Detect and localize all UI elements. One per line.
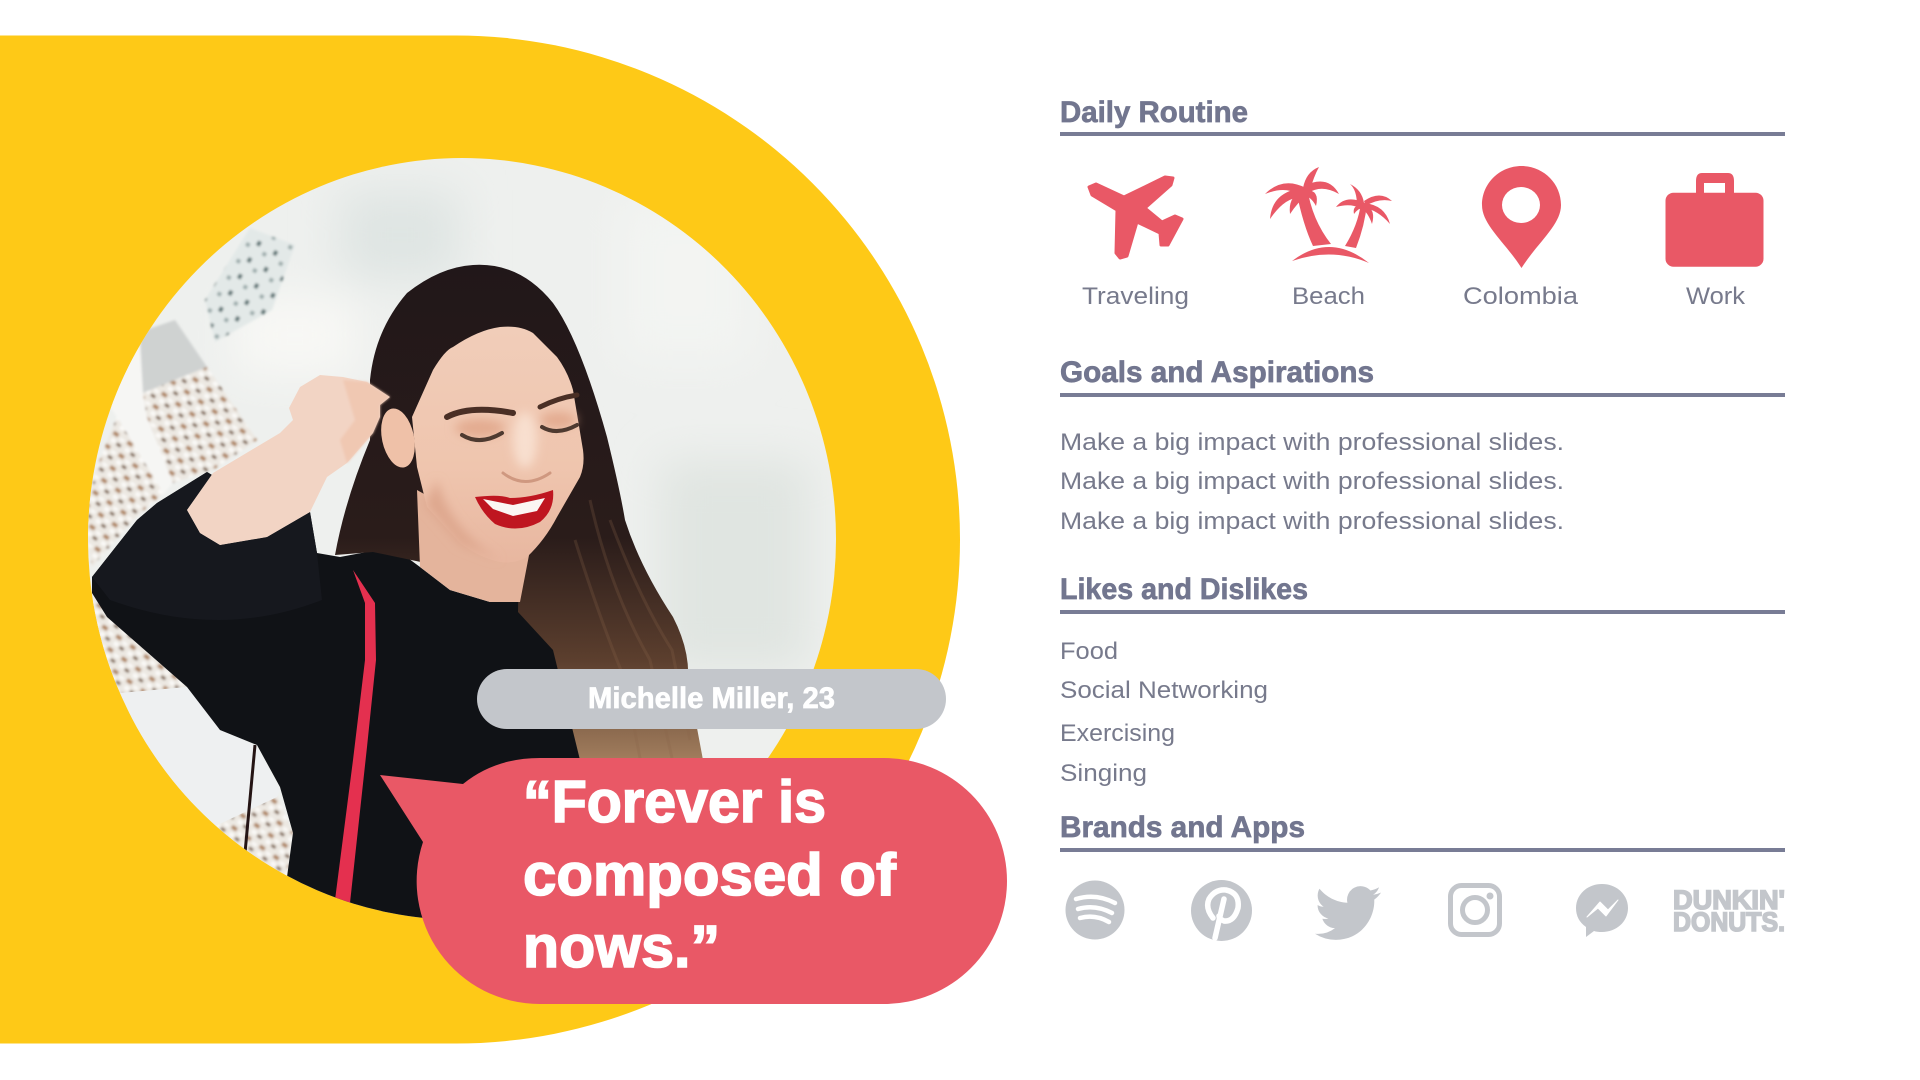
smile: [475, 490, 553, 529]
label: beach: Beach: [1292, 283, 1365, 310]
section: brands and apps: [1060, 811, 1785, 941]
quote bubble: “Forever is: [523, 769, 826, 835]
likes list: [1060, 638, 1268, 787]
name tag: Michelle Miller, 23: [588, 682, 835, 715]
likes list: Food: [1060, 638, 1118, 665]
icon: spotify: [1066, 880, 1124, 940]
wall mosaic: [84, 228, 295, 880]
label: work: Work: [1686, 283, 1746, 310]
ear: [381, 408, 415, 468]
black top: [92, 472, 580, 918]
label: colombia: Colombia: [1463, 283, 1579, 310]
logo: dunkin donuts: [1673, 885, 1785, 937]
label: traveling: Traveling: [1082, 283, 1189, 310]
heading: goals: Goals and Aspirations: [1060, 356, 1374, 389]
neck: [417, 490, 530, 602]
heading: brands: Brands and Apps: [1060, 811, 1305, 844]
brows and eyes: [447, 395, 577, 482]
sleeve highlight: [92, 472, 317, 577]
quote bubble: [380, 758, 1007, 1004]
yellow arch background: [0, 36, 960, 1044]
icon: plane: [1089, 177, 1182, 258]
face shading: [425, 412, 576, 560]
heading: daily routine: Daily Routine: [1060, 96, 1248, 129]
icon: twitter: [1315, 886, 1381, 940]
icon: pinterest: [1191, 880, 1252, 941]
hair strands: [574, 500, 677, 669]
portrait photo: [80, 150, 850, 930]
hair: [335, 265, 703, 760]
icon: palm trees: [1265, 167, 1392, 263]
likes list: Social Networking: [1060, 677, 1268, 704]
heading: likes: Likes and Dislikes: [1060, 573, 1308, 606]
goals text: [1060, 429, 1564, 535]
logo: dunkin donuts: DONUTS.: [1673, 907, 1785, 937]
section: likes and dislikes: [1060, 573, 1785, 787]
bag straps: [335, 570, 376, 903]
likes list: Exercising: [1060, 720, 1175, 747]
hand shading: [340, 380, 390, 463]
name tag: [477, 669, 946, 729]
goals text: Make a big impact with professional slides.: [1060, 468, 1564, 495]
likes list: Singing: [1060, 760, 1147, 787]
section: goals and aspirations: [1060, 356, 1785, 535]
arm and hand: [187, 375, 390, 545]
icon: briefcase: [1666, 173, 1764, 267]
goals text: Make a big impact with professional slides.: [1060, 508, 1564, 535]
white ground: [120, 687, 280, 827]
logo: dunkin donuts: DUNKIN': [1673, 885, 1785, 915]
quote bubble: nows.”: [523, 914, 720, 980]
wall tones: [235, 190, 810, 670]
icon: instagram: [1450, 886, 1500, 934]
quote bubble: composed of: [523, 842, 896, 908]
face: [412, 327, 584, 562]
icon: messenger: [1576, 884, 1628, 937]
section: daily routine: [1060, 96, 1785, 310]
icon: map pin: [1482, 166, 1561, 268]
goals text: Make a big impact with professional slides.: [1060, 429, 1564, 456]
